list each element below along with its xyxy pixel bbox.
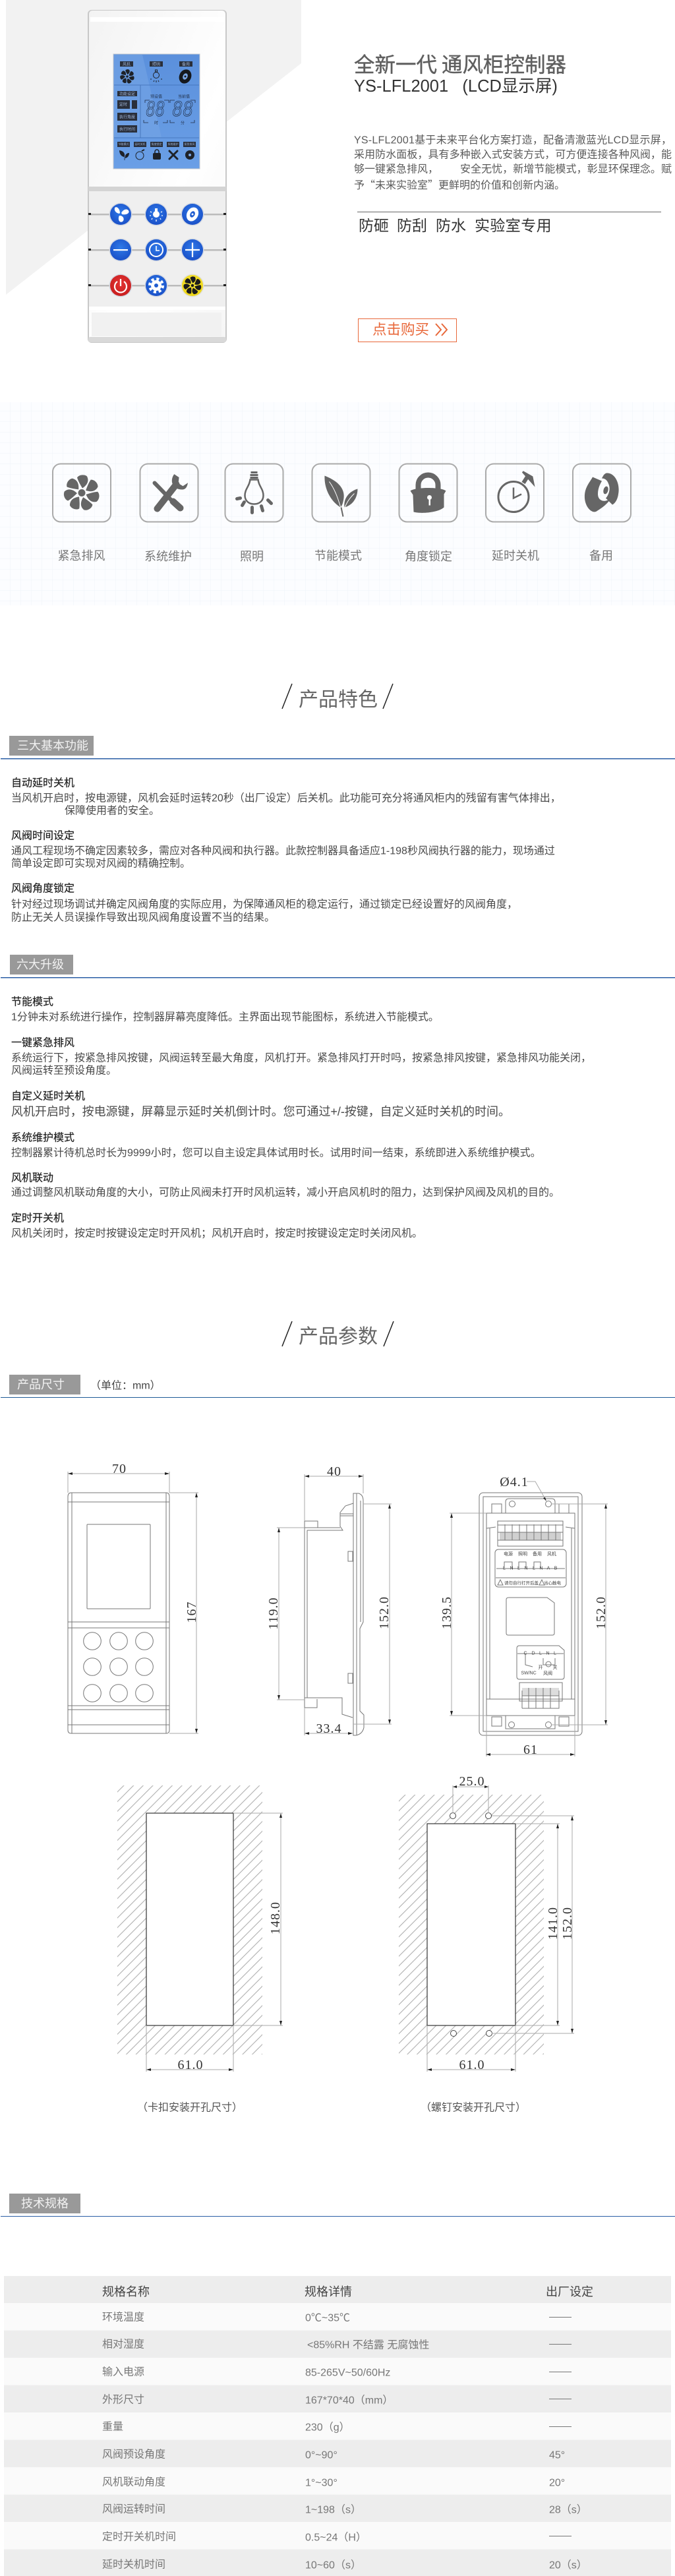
feature labels: 节能模式 bbox=[314, 549, 362, 562]
wiring label top: B bbox=[554, 1567, 558, 1571]
table header: 规格名称 bbox=[102, 2285, 150, 2298]
feature labels: 照明 bbox=[240, 550, 264, 563]
section rule bbox=[1, 2216, 675, 2217]
section rule bbox=[1, 1397, 675, 1398]
hero description: 够一键紧急排风， bbox=[354, 164, 438, 175]
text: damper angle lock: 防止无关人员误操作导致出现风阀角度设置不当的结果。 bbox=[11, 911, 275, 923]
badge: product dimensions bbox=[9, 1375, 80, 1394]
wiring label top: N bbox=[510, 1567, 514, 1571]
dimension: 139.5 bbox=[440, 1513, 486, 1716]
row: damper preset angle: 0°~90° bbox=[305, 2450, 338, 2461]
wiring label bottom: 开 bbox=[538, 1664, 543, 1671]
text: fan linkage: 通过调整风机联动角度的大小，可防止风阀未打开时风机运转，减小开启风机时的阻力，达到保护风阀及风机的目的。 bbox=[11, 1187, 560, 1199]
text: damper angle lock: 针对经过现场调试并确定风阀角度的实际应用，为保障通风柜的稳定运行，通过锁定已经设置好的风阀角度， bbox=[11, 898, 517, 910]
dimension: 152.0 right bbox=[551, 1504, 608, 1725]
text: fan linkage bbox=[11, 1172, 560, 1199]
button: emergency fan bbox=[181, 274, 204, 297]
LCD top labels: 照明 bbox=[152, 61, 160, 67]
row: relative humidity: <85%RH 不结露 无腐蚀性 bbox=[307, 2339, 429, 2351]
LCD digits: 时 bbox=[154, 120, 158, 125]
row: fan linkage angle bbox=[4, 2467, 671, 2495]
LCD top labels: 风机 bbox=[123, 61, 131, 67]
dimension: 152.0: 152.0 bbox=[377, 1596, 392, 1629]
row: fan linkage angle: 20° bbox=[549, 2478, 565, 2488]
heading: product features: 产品特色 bbox=[299, 683, 378, 712]
LCD digits: 分 bbox=[181, 120, 185, 125]
text: maintenance mode: 系统维护模式 bbox=[11, 1131, 74, 1143]
wiring label bottom: C bbox=[523, 1651, 527, 1656]
LCD bottom labels: 角度锁定 bbox=[152, 142, 162, 146]
hero model subtitle: YS-LFL2001 (LCD显示屏) bbox=[354, 77, 558, 96]
row: input power: 85-265V~50/60Hz bbox=[305, 2367, 390, 2379]
button: light bbox=[145, 203, 167, 225]
button: fan bbox=[109, 203, 132, 225]
product: controller device bbox=[88, 10, 227, 343]
dimension: 25.0: 25.0 bbox=[459, 1774, 485, 1789]
icon: angle lock bbox=[399, 464, 457, 522]
badge: product dimensions: 产品尺寸 bbox=[17, 1378, 65, 1391]
row: damper run time: 28（s） bbox=[549, 2504, 587, 2516]
dimension: 61.0 bbox=[427, 2025, 515, 2072]
row: ambient temperature: —— bbox=[549, 2312, 572, 2322]
wiring label top: 照明 bbox=[518, 1551, 527, 1557]
terminal block bottom bbox=[486, 1683, 575, 1716]
dimension: 61 bbox=[486, 1716, 575, 1757]
wiring label top: 风机 bbox=[547, 1551, 556, 1557]
dimension: 152.0 bbox=[353, 1504, 392, 1724]
icon: spare bbox=[573, 464, 631, 522]
hero description bbox=[354, 135, 672, 192]
hero feature tags: 防砸 bbox=[359, 217, 389, 234]
row: relative humidity bbox=[4, 2330, 671, 2358]
button: spare bbox=[181, 203, 204, 225]
dimension: 148.0: 148.0 bbox=[268, 1902, 283, 1934]
text: auto delayed shutdown: 当风机开启时，按电源键，风机会延时运转20秒（出厂设定）后关机。此功能可充分将通风柜内的残留有害气体排出， bbox=[11, 793, 561, 804]
top tab and holes bbox=[492, 1499, 569, 1513]
text: auto delayed shutdown: 自动延时关机 bbox=[11, 777, 74, 789]
feature labels: 系统维护 bbox=[144, 550, 192, 563]
dimension: 148.0 bbox=[233, 1813, 283, 2025]
dimension: width 70: 70 bbox=[112, 1462, 127, 1476]
row: ambient temperature: 环境温度 bbox=[102, 2310, 144, 2323]
wiring label top: 当心触电 bbox=[544, 1579, 562, 1586]
wiring label bottom: D bbox=[531, 1651, 535, 1656]
row: damper preset angle: 45° bbox=[549, 2450, 565, 2461]
table header: 出厂设定 bbox=[546, 2285, 593, 2298]
LCD left labels: 执行角度 bbox=[119, 113, 135, 120]
text: damper time setting bbox=[11, 829, 555, 869]
LCD digits: 88 bbox=[172, 98, 193, 123]
row: damper run time: 风阀运转时间 bbox=[102, 2503, 165, 2515]
wiring label top: N bbox=[539, 1567, 543, 1571]
LCD bottom labels bbox=[117, 142, 196, 147]
row: fan linkage angle: 风机联动角度 bbox=[102, 2476, 165, 2488]
window cutout bbox=[506, 1598, 554, 1635]
icon: energy saving bbox=[312, 464, 370, 522]
hero description: 采用防水面板，具有多种嵌入式安装方式，可方便连接各种风阀，能 bbox=[354, 149, 672, 161]
text: maintenance mode: 控制器累计待机总时长为9999小时，您可以自主设定具体试用时长。试用时间一结束，系统即进入系统维护模式。 bbox=[11, 1147, 541, 1159]
dimension: 61.0 bbox=[146, 2025, 233, 2072]
hero description: YS-LFL2001基于未来平台化方案打造，配备清澈蓝光LCD显示屏， bbox=[354, 135, 672, 146]
wiring label top bbox=[495, 1549, 566, 1587]
dimension: 119.0 bbox=[266, 1528, 305, 1700]
row: delayed shutdown time: 延时关机时间 bbox=[102, 2558, 165, 2570]
wiring label top: 电源 bbox=[504, 1551, 513, 1557]
button: power bbox=[109, 274, 132, 297]
row: relative humidity: 相对湿度 bbox=[102, 2338, 144, 2350]
row: overall size: 外形尺寸 bbox=[102, 2393, 144, 2405]
badge: six upgrades: 六大升级 bbox=[16, 958, 64, 971]
text: damper time setting: 风阀时间设定 bbox=[11, 829, 74, 841]
unit note: （单位：mm） bbox=[90, 1379, 161, 1391]
row: fan linkage angle: 1°~30° bbox=[305, 2478, 338, 2488]
table header bbox=[4, 2276, 671, 2303]
dimension: 152.0 bbox=[492, 1816, 575, 2033]
hero feature tags: 实验室专用 bbox=[475, 217, 552, 234]
dimension: depth 40 bbox=[305, 1464, 363, 1521]
dimension: 152.0: 152.0 bbox=[560, 1907, 575, 1940]
row: ambient temperature bbox=[4, 2303, 671, 2330]
dimension: 61.0: 61.0 bbox=[178, 2058, 203, 2072]
LCD screen bbox=[113, 54, 200, 169]
row: weight: —— bbox=[549, 2421, 572, 2432]
text: timer on/off: 风机关闭时，按定时按键设定定时开风机；风机开启时，按定时按键设定定时关闭风机。 bbox=[11, 1228, 423, 1240]
dimension: 139.5: 139.5 bbox=[440, 1596, 454, 1629]
row: input power bbox=[4, 2358, 671, 2385]
dimension: hole diameter bbox=[500, 1475, 546, 1501]
dimension: height 167: 167 bbox=[185, 1601, 199, 1623]
hero description: 安全无忧，新增节能模式，彰显环保理念。赋 bbox=[460, 162, 672, 175]
text: damper angle lock bbox=[11, 882, 517, 923]
caption: （卡扣安装开孔尺寸） bbox=[137, 2102, 243, 2114]
button: plus bbox=[181, 239, 204, 261]
device shell bbox=[88, 10, 227, 343]
hero title: 全新一代 通风柜控制器 bbox=[354, 48, 566, 78]
dimension: width 70 bbox=[68, 1462, 169, 1493]
LCD top labels: 备用 bbox=[182, 61, 190, 67]
hero feature tags bbox=[359, 217, 552, 234]
wiring label top: 请勿自行打开后盖 bbox=[504, 1579, 539, 1586]
hero description: 予“未来实验室”更鲜明的价值和创新内涵。 bbox=[354, 176, 565, 192]
badge: technical specifications: 技术规格 bbox=[21, 2197, 69, 2210]
text: energy saving mode: 节能模式 bbox=[11, 996, 53, 1007]
text: one-key emergency exhaust bbox=[11, 1036, 591, 1076]
text: energy saving mode: 1分钟未对系统进行操作，控制器屏幕亮度降低。主界面出现节能图标，系统进入节能模式。 bbox=[11, 1011, 439, 1023]
LCD left labels: 功能设定 bbox=[119, 91, 135, 96]
hero feature tags: 防刮 bbox=[397, 217, 427, 234]
button: settings bbox=[145, 274, 167, 297]
heading: product parameters: 产品参数 bbox=[299, 1320, 378, 1349]
LCD bottom icons bbox=[119, 150, 194, 160]
text: damper time setting: 通风工程现场不确定因素较多，需应对各种风阀和执行器。此款控制器具备适应1-198秒风阀执行器的能力，现场通过 bbox=[11, 844, 555, 857]
panel: feature icons bbox=[0, 402, 675, 605]
wiring label bottom: L bbox=[554, 1651, 556, 1656]
keypad buttons bbox=[109, 203, 204, 297]
text: timer on/off bbox=[11, 1212, 423, 1240]
section rule bbox=[1, 758, 675, 760]
drawing: screw mounting cutout bbox=[399, 1774, 575, 2114]
dimension: 61.0: 61.0 bbox=[459, 2058, 485, 2072]
table: specifications bbox=[4, 2276, 671, 2576]
wiring label top: L bbox=[533, 1567, 535, 1571]
feature labels bbox=[58, 549, 613, 563]
drawing: front view bbox=[68, 1462, 199, 1733]
table header: 规格详情 bbox=[305, 2285, 352, 2298]
wiring label bottom: 关 bbox=[552, 1664, 558, 1671]
text: timer on/off: 定时开关机 bbox=[11, 1212, 64, 1224]
badge: three basic functions: 三大基本功能 bbox=[17, 739, 88, 752]
wiring label top: L bbox=[503, 1567, 506, 1571]
buy button: 点击购买 bbox=[372, 322, 429, 338]
dimension: depth 40: 40 bbox=[327, 1464, 341, 1479]
drawing: clip mounting cutout bbox=[117, 1785, 283, 2114]
row: timer time: 定时开关机时间 bbox=[102, 2531, 176, 2542]
wiring label top: A bbox=[547, 1567, 550, 1571]
hero background shape bbox=[6, 0, 301, 295]
row: ambient temperature: 0℃~35℃ bbox=[305, 2313, 350, 2323]
caption: （螺钉安装开孔尺寸） bbox=[421, 2102, 526, 2114]
row: timer time: —— bbox=[549, 2531, 572, 2541]
row: input power: 输入电源 bbox=[102, 2366, 144, 2378]
row: damper preset angle: 风阀预设角度 bbox=[102, 2449, 165, 2461]
text: custom delayed shutdown: 自定义延时关机 bbox=[11, 1091, 85, 1102]
wiring label top: L bbox=[517, 1567, 520, 1571]
dimension: 152.0 right: 152.0 bbox=[594, 1596, 608, 1629]
LCD digits: 当前值 bbox=[178, 94, 190, 99]
badge: technical specifications bbox=[9, 2194, 80, 2213]
text: custom delayed shutdown bbox=[11, 1091, 510, 1118]
dimension: 33.4: 33.4 bbox=[316, 1722, 341, 1736]
LCD bottom labels: 延时关机 bbox=[134, 142, 145, 146]
LCD digits: 88 bbox=[146, 98, 165, 123]
button: minus bbox=[109, 239, 132, 261]
row: damper run time bbox=[4, 2495, 671, 2522]
LCD icon: swirl bbox=[177, 67, 194, 86]
row: weight: 230（g） bbox=[305, 2421, 350, 2433]
text: auto delayed shutdown bbox=[11, 777, 561, 816]
section rule bbox=[1, 977, 675, 978]
row: overall size bbox=[4, 2385, 671, 2412]
text: fan linkage: 风机联动 bbox=[11, 1172, 53, 1184]
LCD bottom labels: 紧急排风 bbox=[185, 142, 195, 146]
text: energy saving mode bbox=[11, 996, 439, 1023]
row: damper run time: 1~198（s） bbox=[305, 2504, 361, 2516]
wiring label bottom: SW/NC bbox=[521, 1671, 537, 1676]
row: overall size: 167*70*40（mm） bbox=[305, 2395, 393, 2407]
dimension: hole diameter: Ø4.1 bbox=[500, 1475, 529, 1489]
LCD top labels bbox=[120, 61, 192, 67]
icon: system maintenance bbox=[140, 464, 198, 522]
LCD bottom labels: 系统维护 bbox=[167, 142, 178, 146]
text: custom delayed shutdown: 风机开启时，按电源键，屏幕显示延时关机倒计时。您可通过+/-按键，自定义延时关机的时间。 bbox=[11, 1105, 510, 1118]
wiring label top: N bbox=[524, 1567, 528, 1571]
terminal block top bbox=[498, 1521, 563, 1546]
row: timer time: 0.5~24（H） bbox=[305, 2532, 367, 2544]
dimension: height 167 bbox=[169, 1493, 199, 1733]
dimension: 141.0 bbox=[515, 1824, 560, 2025]
text: auto delayed shutdown: 保障使用者的安全。 bbox=[65, 804, 160, 816]
wiring label bottom bbox=[517, 1646, 564, 1679]
wiring label top: 备用 bbox=[533, 1551, 542, 1557]
row: delayed shutdown time bbox=[4, 2549, 671, 2576]
text: damper angle lock: 风阀角度锁定 bbox=[11, 882, 74, 894]
wiring label bottom: L bbox=[539, 1651, 542, 1656]
feature labels: 备用 bbox=[589, 549, 613, 562]
dimension: 33.4 bbox=[305, 1708, 353, 1736]
dimension: 61: 61 bbox=[523, 1743, 538, 1757]
LCD digits bbox=[144, 94, 195, 125]
icon: delayed shutdown bbox=[486, 464, 544, 522]
row: delayed shutdown time: 10~60（s） bbox=[305, 2560, 361, 2571]
row: timer time bbox=[4, 2522, 671, 2549]
LCD icon: bulb bbox=[150, 70, 162, 82]
row: relative humidity: —— bbox=[549, 2338, 572, 2350]
text: maintenance mode bbox=[11, 1131, 541, 1159]
feature labels: 角度锁定 bbox=[405, 550, 452, 563]
dimension: 119.0: 119.0 bbox=[266, 1597, 281, 1630]
row: damper preset angle bbox=[4, 2440, 671, 2467]
wiring label bottom: 风阀 bbox=[543, 1670, 552, 1677]
drawing: side view bbox=[266, 1464, 392, 1736]
icon: lighting bbox=[225, 464, 283, 522]
dimension: 141.0: 141.0 bbox=[546, 1907, 560, 1940]
LCD left labels: 执行时间 bbox=[119, 126, 135, 132]
row: overall size: —— bbox=[549, 2393, 572, 2404]
bottom holes bbox=[492, 1716, 569, 1729]
row: weight bbox=[4, 2412, 671, 2440]
hero feature tags: 防水 bbox=[436, 217, 466, 234]
text: one-key emergency exhaust: 一键紧急排风 bbox=[11, 1036, 74, 1048]
icon: emergency fan bbox=[53, 464, 111, 522]
feature labels: 紧急排风 bbox=[58, 549, 105, 562]
button: clock bbox=[145, 239, 167, 261]
buy button bbox=[359, 319, 456, 342]
LCD bottom labels: 节能模式 bbox=[119, 142, 129, 146]
LCD left labels bbox=[117, 91, 137, 133]
LCD left labels: 定时 bbox=[119, 102, 127, 107]
LCD icon: fan bbox=[120, 69, 134, 84]
text: damper time setting: 简单设定即可实现对风阀的精确控制。 bbox=[11, 857, 191, 869]
badge: three basic functions bbox=[9, 736, 94, 756]
dimension: 25.0 bbox=[453, 1774, 488, 1813]
text: one-key emergency exhaust: 系统运行下，按紧急排风按键，风阀运转至最大角度，风机打开。紧急排风打开时吗，按紧急排风按键，紧急排风功能关闭， bbox=[11, 1052, 591, 1064]
wiring label bottom: N bbox=[546, 1651, 550, 1656]
feature labels: 延时关机 bbox=[492, 549, 539, 562]
row: input power: —— bbox=[549, 2366, 572, 2378]
drawing: back view bbox=[440, 1475, 608, 1757]
row: delayed shutdown time: 20（s） bbox=[549, 2560, 587, 2571]
text: one-key emergency exhaust: 风阀运转至预设角度。 bbox=[11, 1064, 117, 1076]
LCD digits: 预设值 bbox=[150, 94, 162, 99]
row: weight: 重量 bbox=[102, 2421, 123, 2433]
badge: six upgrades bbox=[10, 955, 73, 974]
